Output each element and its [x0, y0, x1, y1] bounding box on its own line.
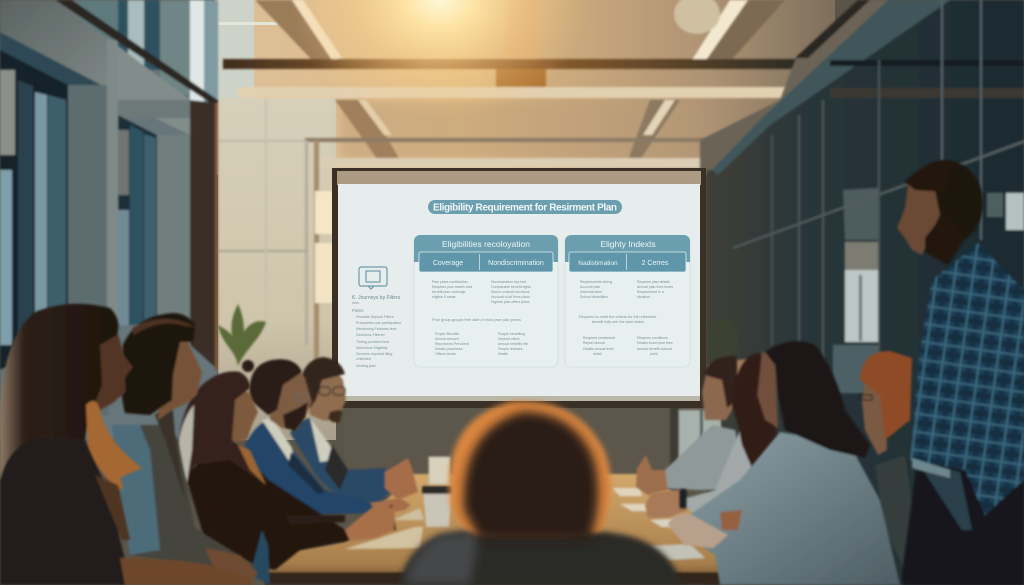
projection screen slide	[338, 184, 700, 401]
slide panel: left: Discrimination key test	[491, 280, 526, 284]
right glass wall	[700, 0, 1024, 585]
slide panel: right: Report annual	[583, 341, 605, 345]
slide left sidebar: Points	[352, 308, 364, 313]
coffee cup and glass	[422, 457, 453, 527]
slide panel: right: Required to meet the criteria for full retirement	[579, 315, 657, 319]
slide panel: left	[414, 235, 558, 367]
slide left sidebar: Vesting plan	[356, 364, 376, 368]
slide panel: left: Offices levels	[435, 352, 456, 356]
icon: chat screen	[359, 267, 387, 289]
slide panel: right: Elighty Indexts	[600, 239, 656, 249]
slide panel: left: Highest plan offers plans	[491, 300, 530, 304]
slide panel: right: Requirement in a	[637, 290, 664, 294]
slide panel: left: Represents Prevalent	[435, 342, 469, 346]
slide panel: right: Required investment	[583, 336, 615, 340]
slide panel: left: Coverage	[433, 260, 463, 267]
person: standing man in plaid shirt	[897, 160, 1024, 585]
slide panel: left: People benefiting	[498, 332, 525, 336]
slide panel: right: Account plan	[580, 285, 600, 289]
slide panel: right: Annual benefit manual	[637, 347, 672, 351]
person: central figure from behind, ginger hair	[400, 401, 682, 585]
slide panel: left: Nondiscrimination	[488, 260, 544, 267]
slide left sidebar: Mentioning Features fees	[356, 327, 397, 331]
slide panel: right: Administration	[580, 290, 602, 294]
slide left sidebar: Selections Eligibility	[356, 346, 388, 350]
slide panel: left: Health	[498, 352, 508, 356]
slide title pill: Eligibility Requirement for Resirment Plan	[433, 202, 617, 214]
wall below screen and rear window	[345, 405, 721, 480]
slide panel: left: Details processes	[435, 347, 463, 351]
slide panel: right: point	[650, 352, 658, 356]
slide panel: right: situation	[637, 295, 650, 299]
slide panel: left: Required plan assets sets	[432, 285, 473, 289]
left wall and windows	[0, 0, 218, 440]
person: woman with short dark hair and grey jacket	[112, 313, 258, 585]
slide left sidebar: Feasible Deposit Filters	[356, 315, 394, 319]
slide panel: right: Requires conditions	[637, 336, 668, 340]
table	[265, 474, 785, 585]
slide panel: right: Annual plan from funds	[637, 285, 673, 289]
slide left sidebar: K. Journeys by Filters	[352, 295, 401, 301]
slide panel: left: Prior group groups free start of most year plan prices	[432, 318, 521, 322]
potted plant	[218, 304, 266, 366]
slide panel: right: benefit fully see the plan status	[592, 320, 644, 324]
person: woman with dark blazer	[175, 371, 396, 585]
slide left sidebar: Services required filing	[356, 352, 392, 356]
sunlight glare	[290, 0, 590, 120]
person: man with glasses, blue jacket	[290, 357, 418, 503]
slide panel: right: 2 Cerres	[642, 260, 669, 267]
person: ginger-haired person with glasses	[860, 351, 915, 570]
person: bearded man in blue suit	[242, 359, 411, 515]
slide panel: right: Requires plan details	[637, 280, 670, 284]
slide panel: left: Above contract functions	[491, 290, 530, 294]
person: woman with dark curly hair	[645, 353, 778, 518]
slide panel: left: Annual amount	[435, 337, 459, 341]
slide panel: right: Details annual level	[583, 347, 614, 351]
slide left sidebar	[352, 267, 401, 368]
slide panel: right: detail	[593, 352, 602, 356]
ceiling lights and beams	[218, 0, 812, 400]
slide left sidebar: Timing provided fees	[356, 340, 389, 344]
slide left sidebar: Preparation par participation	[356, 321, 401, 325]
slide panel: left: Deposit offers	[498, 337, 520, 341]
slide panel: left: benefit plan coverage	[432, 290, 466, 294]
slide left sidebar: Intro	[352, 301, 359, 305]
slide panel: left: Comparable benefit rights	[491, 285, 531, 289]
person: man in light sweater	[636, 356, 745, 495]
slide panel: left: Annual benefits fee	[498, 342, 528, 346]
slide panel: right: Nadistimation	[578, 260, 618, 267]
person: foreground woman, long hair	[0, 304, 252, 585]
slide panel: right: School disabilities	[580, 295, 608, 299]
slide panel: left: eligible 5 areas	[432, 295, 456, 299]
slide panel: left: Eligibilities recoloyation	[442, 239, 530, 249]
slide panel: left: People features	[498, 347, 523, 351]
slide left sidebar: Unlimited	[356, 357, 371, 361]
projection screen frame	[332, 168, 706, 408]
slide panel: right	[565, 235, 690, 367]
slide panel: left: Account of all firms plans	[491, 295, 530, 299]
slide panel: left: Plan years contribution	[432, 280, 468, 284]
slide panel: right: Requirements timing	[580, 280, 612, 284]
slide panel: left: Proper Benefits	[435, 332, 459, 336]
person: woman with long dark hair and blue-grey top	[668, 341, 900, 585]
slide left sidebar: Decisions Filtered	[356, 333, 385, 337]
slide panel: right: Details found plan fees	[637, 341, 673, 345]
